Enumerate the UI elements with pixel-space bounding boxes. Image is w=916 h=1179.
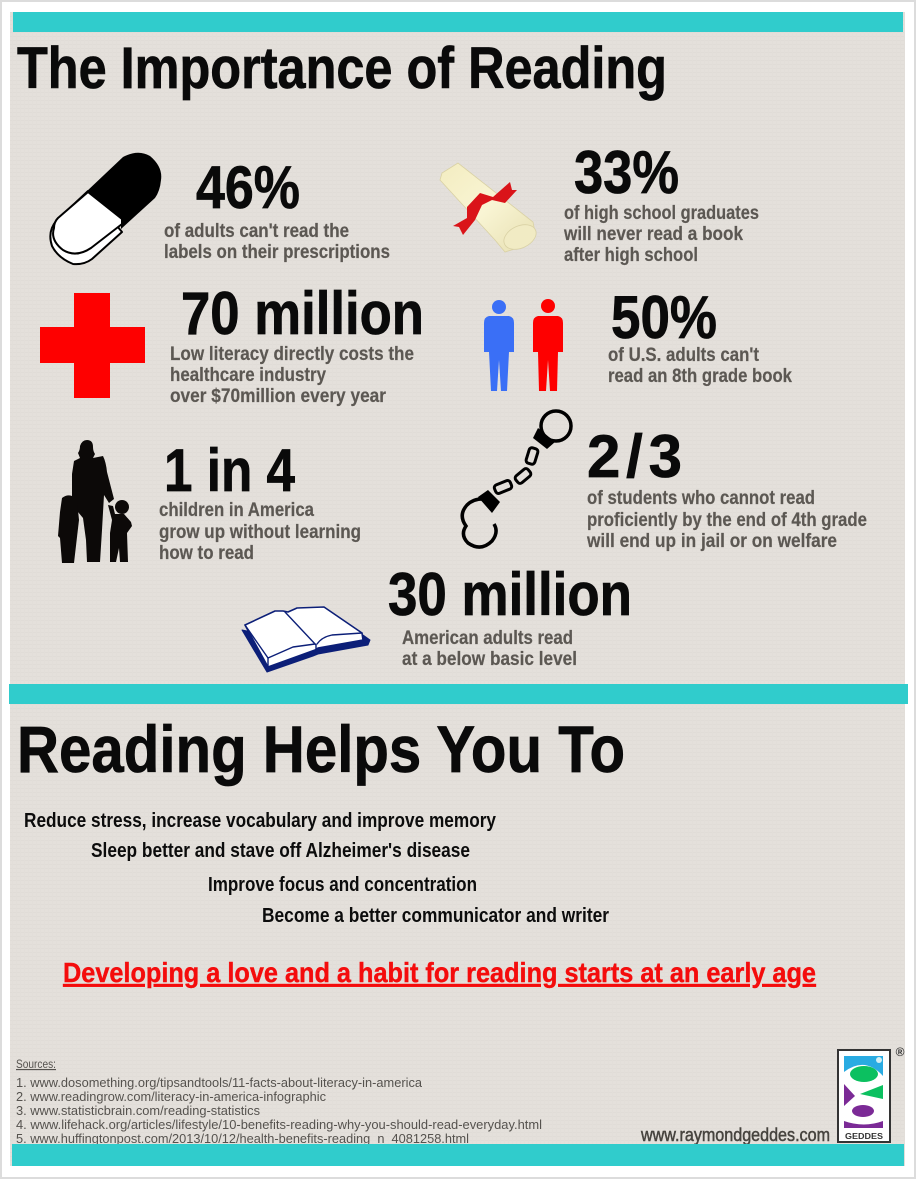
sources: 5. www.huffingtonpost.com/2013/10/12/health-benefits-reading_n_4081258.html <box>16 1131 469 1146</box>
stat: 50 percent: of U.S. adults can't <box>608 344 759 366</box>
benefits list: Sleep better and stave off Alzheimer's disease <box>91 839 470 862</box>
stat: 30 million: American adults read <box>402 627 573 649</box>
stat: 33 percent: of high school graduates <box>564 202 759 224</box>
stat: 30 million <box>242 561 632 672</box>
stat: 46 percent: of adults can't read the <box>164 220 349 242</box>
website url: www.raymondgeddes.com <box>640 1125 830 1145</box>
stat: 1 in 4 <box>58 437 361 564</box>
stat: 1 in 4: 1 in 4 <box>164 437 296 504</box>
stat: 50 percent <box>484 284 792 391</box>
sources: 2. www.readingrow.com/literacy-in-america-infographic <box>16 1089 326 1104</box>
icon: family silhouette <box>58 440 132 563</box>
stat: 33 percent: will never read a book <box>563 223 743 245</box>
stat: 46 percent <box>50 153 390 264</box>
stat: 50 percent: read an 8th grade book <box>608 365 792 387</box>
icon: blue person <box>484 300 514 391</box>
icon: open book <box>242 607 370 672</box>
stat: 33 percent: 33% <box>574 139 679 206</box>
stat: 1 in 4: children in America <box>159 499 314 521</box>
registered mark: ® <box>896 1045 905 1059</box>
stat: 70 million: over $70million every year <box>170 385 386 407</box>
icon: red cross <box>40 293 145 398</box>
stat: 1 in 4: grow up without learning <box>159 521 361 543</box>
benefits list: Reduce stress, increase vocabulary and improve memory <box>24 809 496 832</box>
icon: diploma scroll <box>440 163 540 254</box>
stat: 70 million <box>40 280 424 407</box>
title: The Importance of Reading <box>17 36 667 101</box>
stat: 2/3 <box>462 411 867 552</box>
stat: 2/3: 2/3 <box>587 423 682 490</box>
icon: pill <box>50 153 161 264</box>
stat: 1 in 4: how to read <box>159 542 254 564</box>
stat: 33 percent: after high school <box>564 244 698 266</box>
stat: 50 percent: 50% <box>611 284 717 351</box>
sources: 4. www.lifehack.org/articles/lifestyle/10-benefits-reading-why-you-should-read-everyday.html <box>16 1117 542 1132</box>
stat: 70 million: Low literacy directly costs the <box>170 343 414 365</box>
bottom teal bar <box>12 1144 904 1166</box>
stat: 70 million: 70 million <box>181 280 424 347</box>
benefits list <box>24 809 609 927</box>
red callout: Developing a love and a habit for reading starts at an early age <box>63 957 816 988</box>
icon: red person <box>533 299 563 391</box>
stat: 70 million: healthcare industry <box>170 364 326 386</box>
sources: 1. www.dosomething.org/tipsandtools/11-facts-about-literacy-in-america <box>16 1075 423 1090</box>
logo: geddes <box>838 1050 890 1142</box>
stat: 46 percent: labels on their prescriptions <box>164 241 390 263</box>
stat: 30 million: at a below basic level <box>402 648 577 670</box>
heading: reading helps you to: Reading Helps You To <box>17 712 625 786</box>
middle teal bar <box>9 684 908 704</box>
benefits list: Become a better communicator and writer <box>262 904 609 927</box>
benefits list: Improve focus and concentration <box>208 873 477 896</box>
top teal bar <box>13 12 903 32</box>
stat: 2/3: will end up in jail or on welfare <box>586 530 837 552</box>
logo: geddes: GEDDES <box>845 1132 884 1141</box>
stat: 2/3: of students who cannot read <box>587 487 815 509</box>
sources: 3. www.statisticbrain.com/reading-statistics <box>16 1103 260 1118</box>
sources: Sources: <box>16 1059 56 1071</box>
stat: 30 million: 30 million <box>388 561 632 628</box>
stat: 2/3: proficiently by the end of 4th grade <box>587 509 867 531</box>
stat: 46 percent: 46% <box>196 154 300 221</box>
icon: handcuffs <box>462 411 571 547</box>
sources <box>16 1059 542 1146</box>
stat: 33 percent <box>440 139 759 266</box>
